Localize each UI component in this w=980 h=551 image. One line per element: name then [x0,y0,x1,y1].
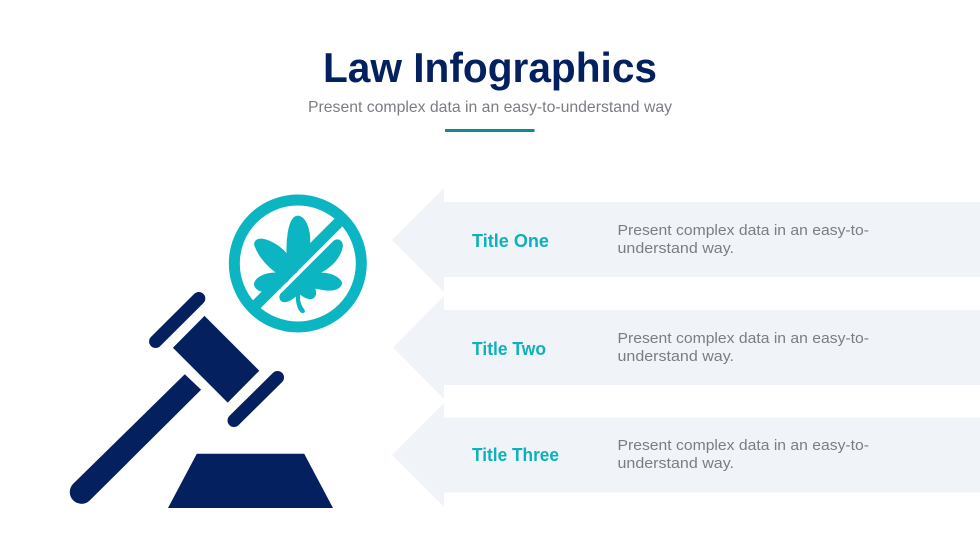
leaf: lower half [280,240,342,313]
heading: title two: Title Two [472,338,546,359]
arrow shape one [392,188,980,292]
title underline accent [445,129,534,132]
gavel handle [70,374,201,504]
icon: prohibited cannabis leaf [234,200,361,327]
title: Law Infographics [323,44,657,91]
heading: title three: Title Three [472,444,559,465]
arrow shape three [392,403,980,507]
gavel upper band [156,298,199,342]
text block: description one: Present complex data in an easy-to- [618,222,869,239]
gavel sound block [168,454,333,508]
gavel lower band [234,378,278,420]
leaf: upper half [255,216,310,292]
panel: arrow three [392,403,980,507]
prohibition ring [234,200,361,327]
gavel head [173,316,259,403]
subtitle: Present complex data in an easy-to-understand way [308,99,672,116]
prohibition slash [253,219,342,308]
text block: description three: understand way. [618,455,734,472]
panel: arrow one [392,188,980,292]
text block: description two: understand way. [618,348,734,365]
heading: title one: Title One [472,230,549,251]
text block: description two: Present complex data in an easy-to- [618,330,869,347]
arrow shape two [393,296,980,399]
text block: description three: Present complex data in an easy-to- [618,437,869,454]
panel: arrow two [393,296,980,399]
icon: gavel [70,298,333,508]
text block: description one: understand way. [618,240,734,257]
